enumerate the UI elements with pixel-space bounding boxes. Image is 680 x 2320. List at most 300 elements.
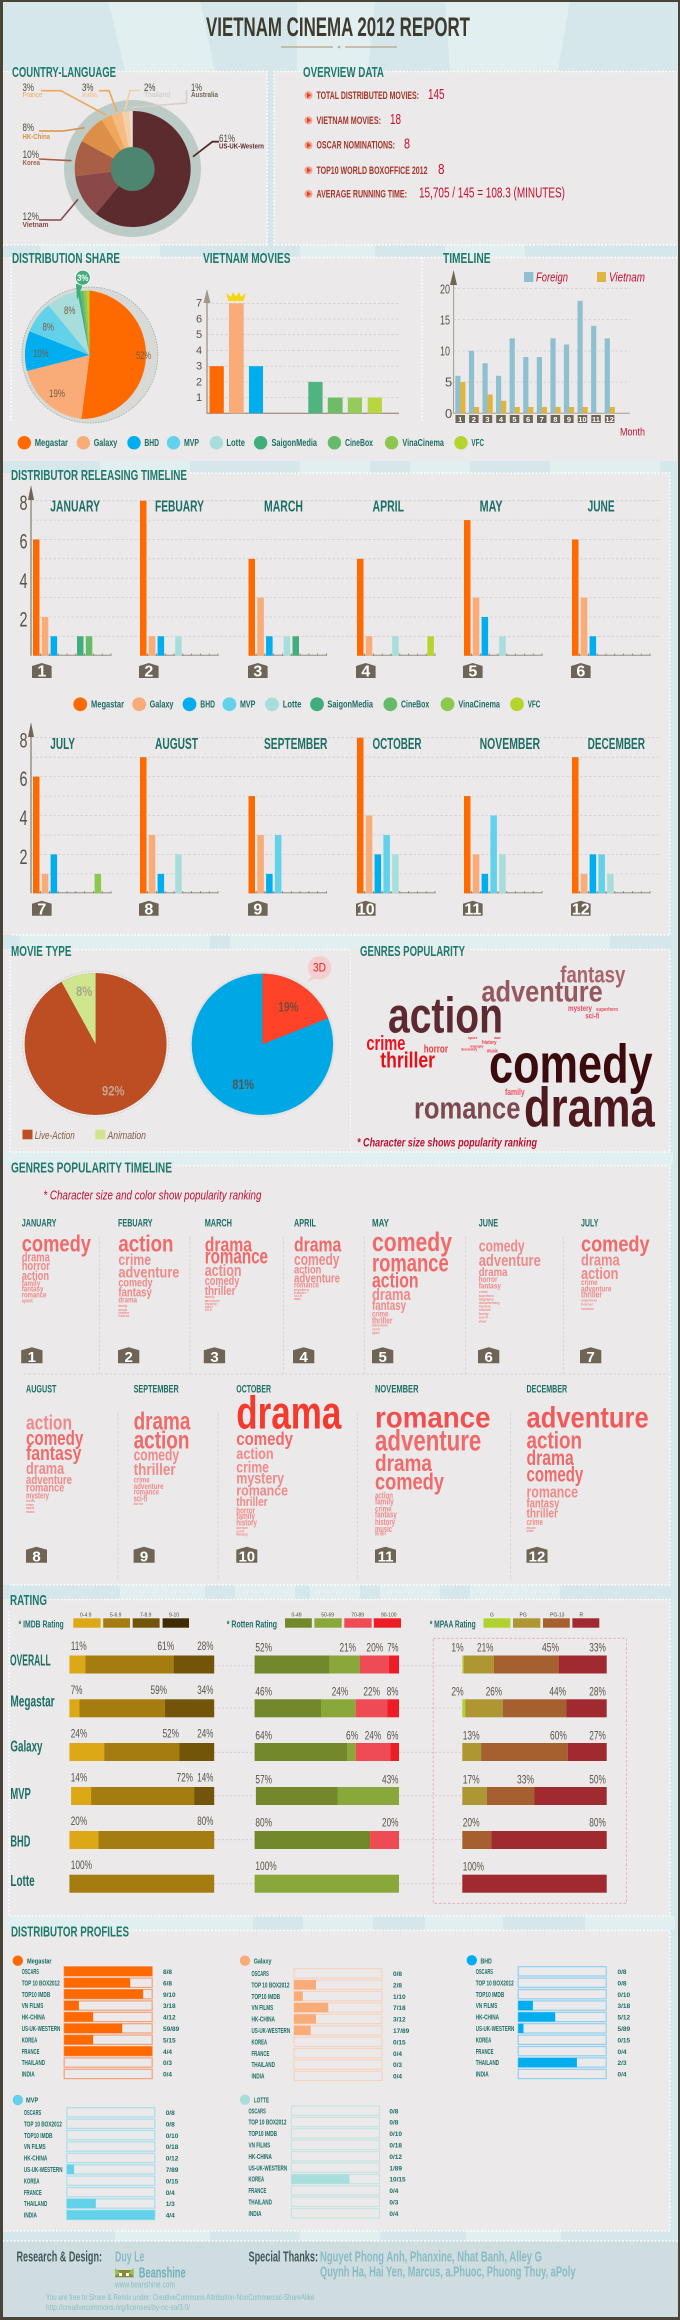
word list: july: crime bbox=[581, 1278, 598, 1287]
word list: febuary: 2 bbox=[125, 1349, 133, 1366]
license note: You are free to Share & Remix under: CreativeCommons Attribution-NonCommercial-ShareAlike bbox=[46, 2292, 315, 2302]
word list: july: thriller bbox=[581, 1289, 602, 1299]
word list: may: comedy bbox=[372, 1227, 452, 1257]
rating row: BHD: 20% bbox=[463, 1818, 480, 1830]
rating row: MVP: MVP bbox=[10, 1786, 31, 1803]
chart axis: second half: 4 bbox=[20, 807, 28, 830]
callouts: pie labels: 3% bbox=[82, 82, 94, 94]
word list: june: comedy bbox=[479, 1237, 525, 1256]
word list: april: sci-fi bbox=[294, 1293, 302, 1298]
month: febuary bbox=[139, 499, 219, 681]
legend: IMDB rating bbox=[19, 1613, 189, 1630]
month: july: JULY bbox=[50, 736, 75, 753]
word list: october: adventure bbox=[236, 1525, 248, 1530]
pie chart: distribution share bbox=[22, 270, 158, 423]
word list: january: drama bbox=[22, 1250, 50, 1265]
credits: special thanks bbox=[248, 2249, 576, 2281]
rating row: megastar: 46% bbox=[255, 1687, 272, 1699]
legend: distributors: Galaxy bbox=[94, 438, 118, 449]
panel: country-language bbox=[3, 64, 267, 245]
rating row: MVP: 57% bbox=[255, 1774, 272, 1786]
pie chart: 3D share: 81% bbox=[232, 1076, 254, 1092]
legend: distributors: VinaCinema bbox=[402, 438, 444, 449]
profile: BHD: VN FILMS bbox=[476, 2003, 498, 2010]
chart axis: second half: 2 bbox=[20, 846, 28, 869]
word list: may: fantasy bbox=[372, 1297, 406, 1313]
profile: lotte: 0/12 bbox=[389, 2154, 402, 2161]
profile: megastar: 9/10 bbox=[163, 1992, 176, 1999]
profile: lotte: FRANCE bbox=[248, 2188, 266, 2195]
axis label: month: Month bbox=[620, 427, 645, 439]
legend: rotten rating bbox=[227, 1613, 401, 1630]
legend: rotten rating: 50-69 bbox=[321, 1613, 334, 1619]
profile: MVP: TOP10 IMDB bbox=[24, 2133, 52, 2140]
word list: febuary: drama bbox=[118, 1295, 137, 1304]
word list: june: romance bbox=[479, 1307, 491, 1312]
profile: MVP: THAILAND bbox=[24, 2201, 47, 2208]
legend: distributors: Megastar bbox=[35, 438, 68, 449]
word cloud: genres: romance bbox=[414, 1090, 520, 1125]
month: october bbox=[356, 736, 436, 918]
word list: december: comedy bbox=[526, 1464, 584, 1487]
legend: MPAA rating: PG-13 bbox=[550, 1613, 565, 1619]
word list: december: fantasy bbox=[526, 1495, 560, 1510]
word list: febuary bbox=[118, 1218, 179, 1366]
donut chart: country language bbox=[64, 100, 201, 237]
word list: febuary: action bbox=[118, 1231, 173, 1257]
profile: MVP: TOP 10 BOX2012 bbox=[24, 2121, 62, 2128]
word list: may: drama bbox=[372, 1285, 411, 1304]
word cloud: genres: fantasy bbox=[560, 962, 625, 988]
profile: MVP: 0/10 bbox=[166, 2133, 179, 2140]
credits: research and design: Duy Le bbox=[115, 2249, 144, 2266]
credits: research and design bbox=[16, 2249, 186, 2289]
callouts: pie labels: 8% bbox=[22, 122, 34, 134]
rating row: BHD: 80% bbox=[589, 1818, 606, 1830]
bar chart: vietnam movies: 5 bbox=[196, 329, 202, 341]
word list: june: drama bbox=[479, 1265, 508, 1279]
word list: august: 8 bbox=[32, 1548, 41, 1565]
word cloud: genres: history bbox=[482, 1040, 497, 1046]
profile: galaxy: 0/8 bbox=[393, 1971, 402, 1978]
profile: BHD: 0/10 bbox=[618, 1992, 631, 1999]
legend: MPAA rating: * MPAA Rating bbox=[430, 1619, 476, 1630]
rating row: galaxy: 24% bbox=[365, 1730, 381, 1742]
rating row: BHD: 80% bbox=[197, 1816, 213, 1828]
profile: megastar: 0/4 bbox=[163, 2072, 172, 2079]
month: november bbox=[463, 736, 543, 918]
profile: megastar: 3/18 bbox=[163, 2003, 176, 2010]
word list: august: music bbox=[26, 1509, 35, 1514]
word list: october: comedy bbox=[236, 1429, 293, 1449]
word list: june: JUNE bbox=[479, 1218, 498, 1230]
footer bbox=[3, 2241, 678, 2317]
profile: MVP: 0/4 bbox=[166, 2190, 175, 2197]
heading: distributor releasing timeline: DISTRIBUTOR RELEASING TIMELINE bbox=[11, 467, 187, 484]
word list: june: sci-fi bbox=[479, 1314, 488, 1320]
word list: august: horror bbox=[26, 1498, 35, 1503]
panel: distributor releasing timeline bbox=[3, 467, 670, 935]
word list: april: mystery bbox=[294, 1287, 310, 1292]
word list: november: family bbox=[375, 1496, 394, 1506]
profile: megastar: 0/3 bbox=[163, 2060, 172, 2067]
rating row: megastar bbox=[10, 1685, 607, 1717]
word list: march: action bbox=[205, 1261, 242, 1280]
word list: november bbox=[375, 1383, 490, 1565]
profile: megastar: VN FILMS bbox=[22, 2003, 44, 2010]
profile: galaxy: 1/10 bbox=[393, 1994, 406, 2001]
chart axis: first half bbox=[20, 485, 659, 656]
rating row: galaxy: 6% bbox=[387, 1730, 398, 1742]
profile: galaxy: TOP10 IMDB bbox=[252, 1994, 280, 2001]
rating row: MVP: 43% bbox=[382, 1774, 398, 1786]
word list: august: comedy bbox=[26, 1428, 84, 1450]
bar chart: vietnam movies bbox=[196, 289, 399, 413]
word list: january: JANUARY bbox=[22, 1218, 57, 1230]
profile: MVP: 0/8 bbox=[166, 2110, 175, 2117]
panel: genres popularity timeline bbox=[3, 1160, 670, 1585]
rating row: overall: 20% bbox=[366, 1643, 383, 1655]
stat: average running time: 15,705 / 145 = 108.3 (MINUTES) bbox=[419, 184, 565, 201]
word cloud: genres: crime bbox=[366, 1033, 405, 1055]
profile: galaxy: US-UK-WESTERN bbox=[252, 2028, 290, 2035]
rating row: lotte: 100% bbox=[71, 1860, 92, 1872]
word list: october bbox=[236, 1383, 342, 1565]
word list: march: thriller bbox=[205, 1283, 236, 1298]
profile: lotte: INDIA bbox=[248, 2211, 262, 2218]
word list: may: 5 bbox=[379, 1349, 387, 1366]
profile: lotte: LOTTE bbox=[254, 2097, 269, 2104]
legend: distributors: VFC bbox=[471, 438, 484, 449]
pie chart: live-action vs animation bbox=[23, 971, 169, 1117]
profile: lotte: THAILAND bbox=[248, 2200, 272, 2206]
chart axis: first half: 8 bbox=[20, 492, 28, 515]
word list: march: sci-fi bbox=[205, 1307, 212, 1312]
word list: febuary: fantasy bbox=[118, 1285, 152, 1300]
word list: june: mystery bbox=[479, 1304, 491, 1308]
word list: july: horror bbox=[581, 1302, 593, 1307]
word list: august: drama bbox=[26, 1459, 65, 1478]
rating row: megastar: 7% bbox=[71, 1685, 82, 1697]
month: november: 11 bbox=[464, 901, 481, 918]
word list: september: comedy bbox=[134, 1446, 179, 1465]
profile: galaxy: OSCARS bbox=[252, 1971, 269, 1978]
word cloud: genres: music bbox=[487, 1048, 498, 1054]
month: march: MARCH bbox=[264, 499, 303, 516]
profile: BHD: 0/8 bbox=[618, 1980, 627, 1987]
rating row: lotte: 100% bbox=[463, 1862, 484, 1874]
rating row: overall: 52% bbox=[255, 1643, 272, 1655]
legend: distributors: Lotte bbox=[283, 700, 302, 711]
callouts: pie labels: Vietnam bbox=[22, 220, 49, 229]
legend: live-action / animation bbox=[22, 1130, 146, 1142]
rating row: overall: 45% bbox=[542, 1643, 559, 1655]
bar chart: monthly timeline bbox=[440, 270, 645, 439]
word list: august bbox=[26, 1383, 84, 1565]
callouts: pie labels: 10% bbox=[22, 149, 39, 161]
heading: distributor profiles: DISTRIBUTOR PROFILES bbox=[11, 1924, 129, 1941]
word list: febuary: music bbox=[118, 1307, 128, 1312]
word list: october: fantasy bbox=[236, 1532, 249, 1537]
panel: movie type bbox=[3, 943, 351, 1152]
bar chart: monthly timeline: 3 bbox=[485, 415, 489, 424]
word list: november: fantasy bbox=[375, 1510, 397, 1520]
bar chart: vietnam movies: 3 bbox=[196, 361, 202, 373]
chart axis: first half: 2 bbox=[20, 609, 28, 632]
bar chart: vietnam movies: 1 bbox=[196, 392, 202, 404]
word list: january: family bbox=[22, 1279, 41, 1288]
word list: may: adventure bbox=[372, 1323, 389, 1328]
profile: megastar: Megastar bbox=[27, 1958, 52, 1965]
month: november: NOVEMBER bbox=[480, 736, 540, 753]
panel: distributor profiles bbox=[3, 1924, 670, 2231]
word list: september: action bbox=[134, 1426, 190, 1454]
word list: april: APRIL bbox=[294, 1218, 316, 1230]
word cloud: genres: mystery bbox=[568, 1004, 592, 1013]
month: january: JANUARY bbox=[50, 499, 100, 516]
stat: top10 world boxoffice: TOP10 WORLD BOXOFFICE 2012 bbox=[316, 165, 428, 177]
bar chart: monthly timeline: 4 bbox=[499, 415, 504, 424]
pie chart: live-action vs animation: 92% bbox=[102, 1083, 125, 1099]
profile: BHD: HK-CHINA bbox=[476, 2015, 499, 2022]
bar chart: vietnam movies: 2 bbox=[196, 376, 202, 388]
rating row: galaxy: 24% bbox=[71, 1729, 87, 1741]
profile: lotte bbox=[240, 2094, 406, 2218]
legend: rotten rating: 0-49 bbox=[292, 1613, 302, 1619]
chart axis: first half: 6 bbox=[20, 530, 28, 553]
profile: MVP: OSCARS bbox=[24, 2110, 41, 2117]
rating row: megastar: Megastar bbox=[10, 1694, 55, 1711]
profile: MVP: 1/3 bbox=[166, 2201, 175, 2208]
rating row: overall: 33% bbox=[589, 1643, 606, 1655]
bar chart: vietnam movies: 4 bbox=[196, 345, 202, 357]
word list: june: crime bbox=[479, 1289, 488, 1294]
profile: galaxy: 0/15 bbox=[393, 2039, 406, 2046]
word cloud: genres bbox=[366, 962, 655, 1139]
profile: BHD bbox=[467, 1955, 631, 2079]
stat: top10 world boxoffice bbox=[304, 161, 444, 178]
profile: lotte: US-UK-WESTERN bbox=[248, 2165, 287, 2172]
stat: vietnam movies: VIETNAM MOVIES: bbox=[316, 115, 381, 127]
rating row: megastar: 24% bbox=[332, 1687, 348, 1699]
word list: january bbox=[21, 1218, 91, 1366]
profile: lotte: TOP 10 BOX2012 bbox=[248, 2120, 287, 2127]
legend: distributors: Megastar bbox=[91, 700, 124, 711]
profile: galaxy: 7/18 bbox=[393, 2005, 406, 2012]
word cloud: genres: war bbox=[493, 1035, 501, 1040]
word list: march: mystery bbox=[205, 1301, 217, 1306]
pie chart: 3D share bbox=[189, 956, 335, 1117]
word list: march: MARCH bbox=[205, 1218, 232, 1230]
profile: BHD: 5/12 bbox=[618, 2015, 631, 2022]
word list: september: adventure bbox=[134, 1482, 164, 1491]
rating row: overall: 7% bbox=[387, 1643, 398, 1655]
pie chart: 3D share: 19% bbox=[278, 999, 299, 1015]
word list: september: 9 bbox=[140, 1548, 148, 1565]
rating row: galaxy: 6% bbox=[346, 1730, 358, 1742]
callouts: pie labels: US-UK-Western bbox=[219, 142, 264, 150]
word cloud: genres: superhero bbox=[596, 1007, 618, 1013]
rating row: BHD: 20% bbox=[71, 1816, 87, 1828]
heading: country-language: COUNTRY-LANGUAGE bbox=[12, 64, 116, 81]
word list: april: adventure bbox=[294, 1271, 340, 1286]
legend: rotten rating: 70-89 bbox=[351, 1613, 364, 1619]
word list: september: drama bbox=[134, 1407, 191, 1435]
word list: october: crime bbox=[236, 1460, 269, 1477]
pie chart: live-action vs animation: 8% bbox=[76, 983, 93, 999]
legend: distributors: CineBox bbox=[345, 438, 373, 449]
word list: november: 11 bbox=[378, 1548, 393, 1565]
legend: distributors bbox=[73, 697, 540, 711]
word list: october: thriller bbox=[236, 1494, 268, 1509]
rating row: galaxy: 13% bbox=[463, 1730, 480, 1742]
profile: megastar: US-UK-WESTERN bbox=[22, 2026, 60, 2033]
word list: june: war bbox=[478, 1318, 487, 1324]
profile: BHD: 0/15 bbox=[618, 2037, 631, 2044]
word list: march: drama bbox=[205, 1235, 253, 1257]
callouts: pie labels: Korea bbox=[22, 158, 41, 167]
profile: MVP: VN FILMS bbox=[24, 2144, 46, 2151]
legend: distributors: Lotte bbox=[226, 438, 245, 449]
profile: BHD: TOP 10 BOX2012 bbox=[476, 1980, 514, 1987]
profile: galaxy: 0/3 bbox=[393, 2062, 402, 2069]
legend: live-action / animation: Live-Action bbox=[35, 1130, 75, 1142]
month: may bbox=[463, 499, 543, 681]
callouts: pie labels: India bbox=[82, 90, 98, 99]
word list: october: romance bbox=[236, 1483, 288, 1500]
profile: MVP: 0/8 bbox=[166, 2121, 175, 2128]
stat: top10 world boxoffice: 8 bbox=[438, 161, 444, 178]
word list: october: sci-fi bbox=[236, 1528, 244, 1533]
rating row: megastar: 22% bbox=[363, 1687, 380, 1699]
stat: vietnam movies bbox=[304, 111, 401, 128]
profile: galaxy: INDIA bbox=[252, 2074, 264, 2081]
profile: lotte: VN FILMS bbox=[248, 2142, 270, 2150]
word list: september bbox=[134, 1383, 191, 1565]
word list: november: comedy bbox=[375, 1468, 444, 1494]
word list: july: adventure bbox=[581, 1285, 612, 1294]
word list: june: 6 bbox=[485, 1349, 493, 1366]
profile: galaxy: 2/8 bbox=[393, 1982, 402, 1989]
profile: galaxy: TOP 10 BOX2012 bbox=[252, 1982, 290, 1989]
rating row: megastar: 59% bbox=[150, 1685, 167, 1697]
callout: 3D: 3D bbox=[313, 961, 326, 975]
callouts: pie labels: Australia bbox=[191, 90, 219, 99]
month: febuary: 2 bbox=[144, 664, 153, 681]
word list: august: AUGUST bbox=[26, 1383, 57, 1395]
word list: march: 3 bbox=[210, 1349, 219, 1366]
profile: lotte: 10/15 bbox=[389, 2177, 406, 2184]
month: june bbox=[571, 499, 651, 681]
profile: BHD: OSCARS bbox=[476, 1969, 493, 1976]
note: character size and color: * Character size and color show popularity ranking bbox=[43, 1188, 261, 1202]
word list: december: music bbox=[526, 1525, 537, 1530]
callouts: pie labels: Thailand bbox=[144, 90, 170, 99]
word list: august: romance bbox=[26, 1481, 64, 1495]
rating row: megastar: 44% bbox=[549, 1687, 566, 1699]
profile: galaxy: FRANCE bbox=[252, 2051, 269, 2058]
word list: december: action bbox=[526, 1427, 582, 1454]
word list: may: sport bbox=[372, 1330, 380, 1335]
rating row: MVP: 50% bbox=[589, 1774, 606, 1786]
word list: january: horror bbox=[22, 1258, 50, 1273]
word list: september: romance bbox=[134, 1487, 159, 1496]
profile: galaxy: 0/4 bbox=[393, 2051, 402, 2058]
bar chart: monthly timeline: 2 bbox=[472, 415, 476, 424]
bar chart: vietnam movies: 7 bbox=[196, 298, 202, 310]
profile: galaxy: 3/12 bbox=[393, 2017, 406, 2024]
legend: MPAA rating bbox=[430, 1613, 599, 1630]
bar chart: monthly timeline: 7 bbox=[540, 415, 544, 424]
credits: research and design: Research & Design: bbox=[16, 2249, 102, 2266]
month: may: 5 bbox=[468, 664, 477, 681]
stat: average running time: AVERAGE RUNNING TIME: bbox=[316, 188, 407, 200]
word list: october: horror bbox=[236, 1505, 255, 1515]
chart axis: second half: 6 bbox=[20, 768, 28, 791]
month: june: 6 bbox=[576, 664, 585, 681]
word list: april: action bbox=[294, 1262, 321, 1276]
word cloud: genres: thriller bbox=[380, 1048, 435, 1073]
stat: oscar nominations bbox=[304, 136, 410, 153]
word list: october: mystery bbox=[236, 1470, 284, 1487]
bar chart: monthly timeline: 11 bbox=[592, 415, 600, 424]
profile: BHD: 3/18 bbox=[618, 2003, 631, 2010]
word list: november: adventure bbox=[375, 1425, 481, 1458]
word list: november: romance bbox=[375, 1402, 490, 1435]
word list: febuary: crime bbox=[118, 1252, 151, 1269]
word list: march: romance bbox=[205, 1245, 268, 1268]
word list: january: fantasy bbox=[22, 1285, 44, 1294]
month: september bbox=[248, 736, 328, 918]
word list: july bbox=[580, 1218, 650, 1366]
rating row: overall: 28% bbox=[197, 1641, 213, 1653]
word list: november: NOVEMBER bbox=[375, 1383, 419, 1395]
rating row: overall: 21% bbox=[340, 1643, 356, 1655]
word list: febuary: thriller bbox=[118, 1310, 130, 1315]
word list: july: superhero bbox=[581, 1298, 597, 1302]
word list: march: family bbox=[205, 1294, 215, 1299]
profile: lotte: 0/10 bbox=[389, 2131, 402, 2138]
legend: distributors: VinaCinema bbox=[458, 700, 500, 711]
credits: special thanks: Nguyet Phong Anh, Phanxine, Nhat Banh, Alley G bbox=[320, 2249, 542, 2266]
profile: galaxy: 17/89 bbox=[393, 2028, 410, 2035]
rating row: MVP: 33% bbox=[517, 1774, 534, 1786]
heading: movie type: MOVIE TYPE bbox=[11, 943, 72, 960]
word list: july: JULY bbox=[581, 1218, 599, 1230]
month: january: 1 bbox=[37, 664, 46, 681]
word list: january: sport bbox=[22, 1299, 33, 1305]
legend: distributors bbox=[18, 436, 484, 449]
legend: MPAA rating: G bbox=[490, 1613, 494, 1619]
rating row: overall: 11% bbox=[71, 1641, 87, 1653]
month: december: DECEMBER bbox=[588, 736, 645, 753]
word list: november: music bbox=[375, 1524, 392, 1534]
rating row: galaxy bbox=[10, 1729, 607, 1761]
rating row: galaxy: 52% bbox=[163, 1729, 179, 1741]
bar chart: monthly timeline: 5 bbox=[445, 374, 452, 390]
word list: september: crime bbox=[134, 1475, 150, 1484]
heading: overview data: OVERVIEW DATA bbox=[303, 64, 384, 81]
rating row: megastar: 8% bbox=[387, 1687, 398, 1699]
month: january bbox=[32, 499, 112, 681]
profile: megastar: THAILAND bbox=[22, 2060, 45, 2067]
profile: lotte: 1/89 bbox=[389, 2165, 402, 2172]
rating row: megastar: 34% bbox=[197, 1685, 213, 1697]
word list: july: 7 bbox=[587, 1349, 595, 1366]
profile: megastar: 4/4 bbox=[163, 2049, 172, 2056]
callout: 3D bbox=[307, 956, 331, 982]
bar chart: monthly timeline: 1 bbox=[458, 415, 462, 424]
